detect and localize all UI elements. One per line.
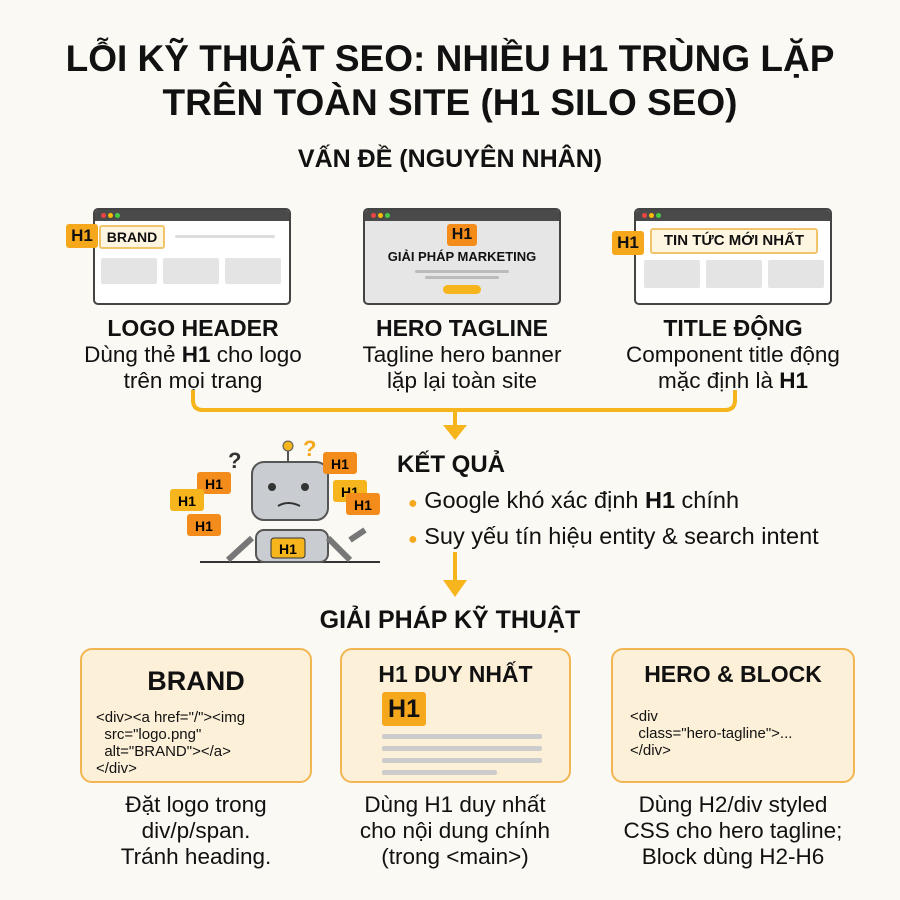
text: brand solution: Tránh heading.: [121, 844, 271, 869]
icon: confused robot: ?: [303, 436, 316, 461]
icon: H1 tag logo: [66, 224, 98, 248]
icon: confused robot: H1: [331, 456, 349, 472]
text: logo header: LOGO HEADER: [107, 315, 279, 341]
section heading: solutions: GIẢI PHÁP KỸ THUẬT: [320, 606, 580, 634]
icon: confused robot: H1: [279, 541, 297, 557]
text: hero tagline: Tagline hero banner: [363, 342, 561, 367]
text: brand solution: div/p/span.: [142, 818, 250, 843]
text: H1 solution: (trong <main>): [381, 844, 529, 869]
icon: confused robot: H1: [205, 476, 223, 492]
text: hero solution: Dùng H2/div styled: [639, 792, 827, 817]
icon: confused robot: H1: [354, 497, 372, 513]
icon: confused robot: ?: [228, 448, 241, 473]
card: hero & block: HERO & BLOCK: [644, 661, 822, 687]
panel: dynamic title window: TIN TỨC MỚI NHẤT: [664, 232, 804, 249]
title: TRÊN TOÀN SITE (H1 SILO SEO): [163, 82, 737, 123]
panel: hero tagline window: GIẢI PHÁP MARKETING: [388, 249, 536, 264]
text: H1 solution: [360, 792, 550, 869]
text: H1 solution: Dùng H1 duy nhất: [364, 792, 546, 817]
text: hero tagline: HERO TAGLINE: [376, 315, 548, 341]
text: title dong: mặc định là H1: [658, 368, 808, 393]
text: hero solution: CSS cho hero tagline;: [624, 818, 842, 843]
text: logo header: Dùng thẻ H1 cho logo: [84, 342, 302, 367]
panel: logo header window: BRAND: [107, 229, 157, 245]
text: brand solution: [121, 792, 271, 869]
icon: H1 tag logo: H1: [71, 226, 93, 245]
panel: hero tagline window: H1: [452, 226, 472, 243]
text: logo header: trên mọi trang: [124, 368, 262, 393]
bullet list: results: [408, 487, 819, 549]
arrow: to solutions: [443, 552, 467, 597]
text: title dong: Component title động: [626, 342, 840, 367]
icon: confused robot: H1: [178, 493, 196, 509]
card: single H1: [340, 648, 571, 783]
text: hero solution: [624, 792, 842, 869]
card: hero & block: <div class="hero-tagline">... </div>: [630, 708, 792, 759]
heading: result: KẾT QUẢ: [397, 451, 505, 478]
icon: confused robot: H1: [195, 518, 213, 534]
text: title dong: [626, 315, 840, 393]
card: single H1: H1: [388, 695, 420, 723]
text: brand solution: Đặt logo trong: [125, 792, 267, 817]
text: hero solution: Block dùng H2-H6: [642, 844, 824, 869]
icon: confused robot: H1: [341, 484, 359, 500]
title: [66, 38, 834, 123]
card: brand: BRAND: [147, 666, 245, 696]
card: brand: [80, 648, 312, 783]
icon: confused robot: [170, 436, 380, 563]
bullet list: results: ● Google khó xác định H1 chính: [408, 487, 739, 513]
card: hero & block: [611, 648, 855, 783]
text: H1 solution: cho nội dung chính: [360, 818, 550, 843]
panel: hero tagline window: [363, 208, 561, 305]
text: hero tagline: lặp lại toàn site: [387, 368, 537, 393]
bullet list: results: ● Suy yếu tín hiệu entity & search intent: [408, 523, 819, 549]
text: title dong: TITLE ĐỘNG: [663, 315, 803, 341]
title: LỖI KỸ THUẬT SEO: NHIỀU H1 TRÙNG LẶP: [66, 38, 834, 79]
icon: H1 tag title: H1: [617, 233, 639, 252]
text: hero tagline: [363, 315, 562, 393]
icon: H1 tag title: [612, 231, 644, 255]
panel: dynamic title window: [634, 208, 832, 305]
section heading: causes: VẤN ĐỀ (NGUYÊN NHÂN): [298, 145, 602, 173]
arrow: connector to result: [191, 390, 737, 440]
text: logo header: [84, 315, 302, 393]
panel: logo header window: [93, 208, 291, 305]
card: single H1: H1 DUY NHẤT: [378, 661, 533, 687]
card: brand: <div><a href="/"><img src="logo.png" alt="BRAND"></a> </div>: [96, 709, 245, 777]
